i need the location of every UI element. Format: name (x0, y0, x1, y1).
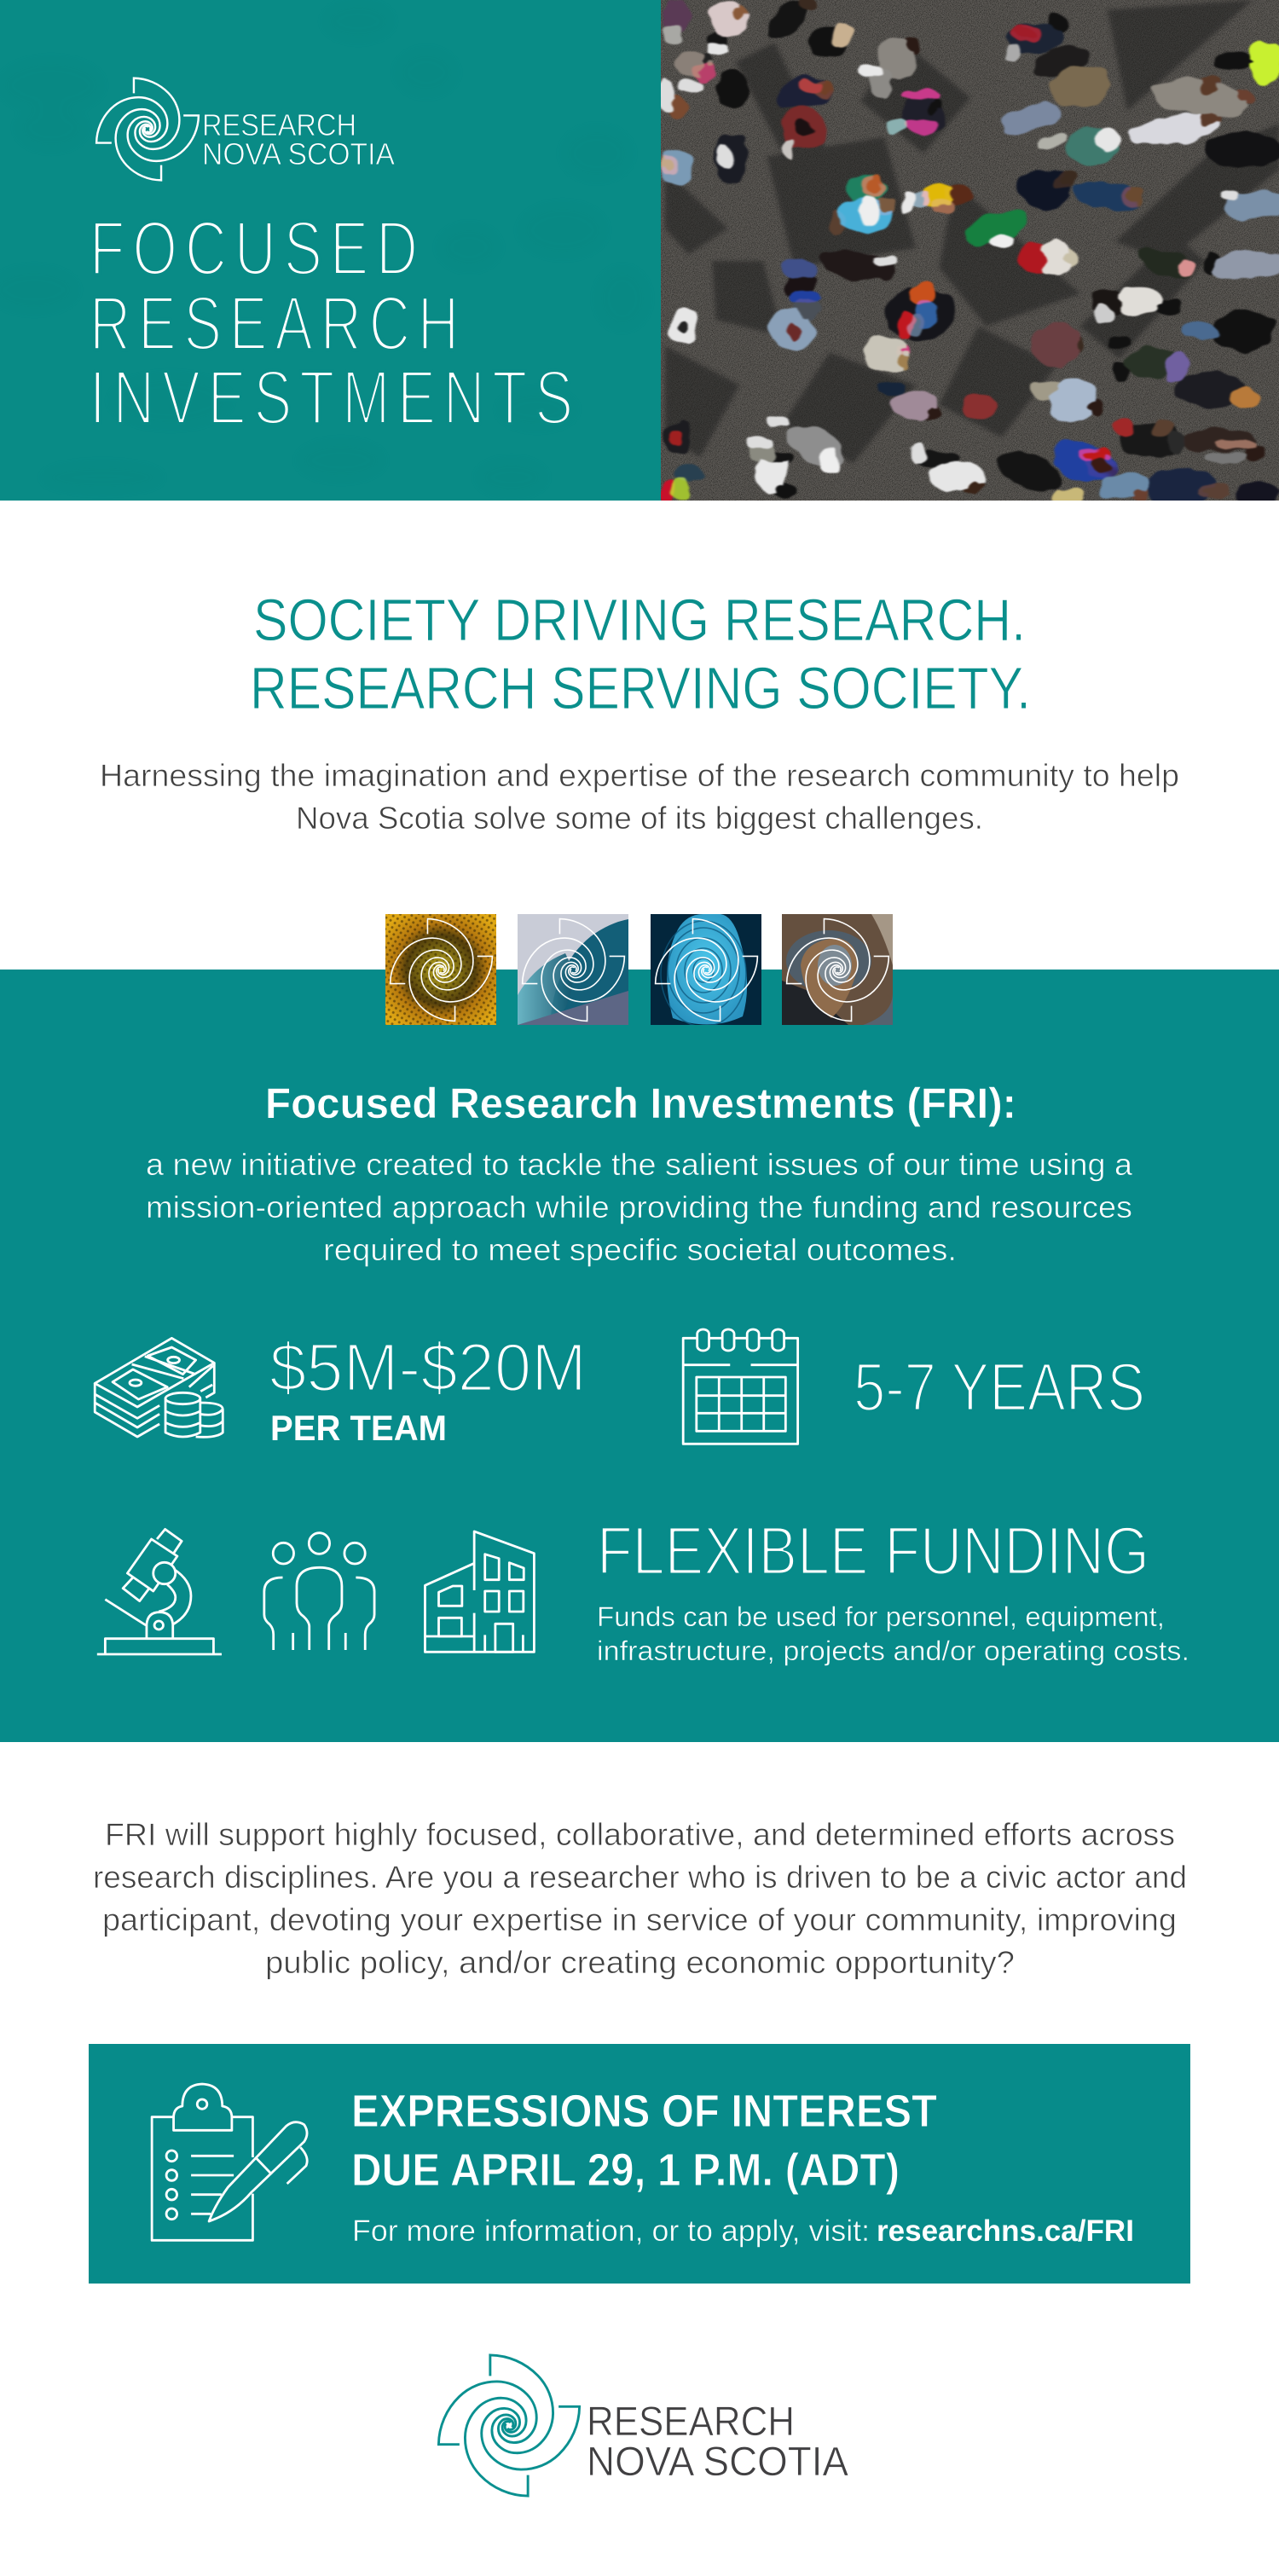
intro paragraph (100, 758, 1179, 836)
icon: spiral logo (96, 78, 199, 180)
image: ocean wave spiral (518, 914, 628, 1025)
panel: teal information section (0, 914, 1279, 1742)
intro paragraph: Harnessing the imagination and expertise of the research community to help (100, 758, 1179, 793)
heading: society driving research: RESEARCH SERVING SOCIETY. (250, 655, 1031, 721)
icon: spiral logo (438, 2355, 580, 2496)
main title: FOCUSED (90, 206, 425, 292)
panel: hero header (0, 0, 1279, 503)
stat: funding per team (95, 1329, 587, 1448)
main title (90, 206, 581, 441)
icon: microscope (97, 1529, 222, 1654)
years text: 5-7 YEARS (854, 1349, 1145, 1425)
heading: society driving research (250, 587, 1031, 721)
image: spiral staircase (782, 914, 893, 1025)
footer logo (438, 2355, 848, 2496)
flexible funding description: infrastructure, projects and/or operating costs. (597, 1635, 1189, 1666)
more information line: For more information, or to apply, visit: (352, 2214, 870, 2248)
heading: society driving research: SOCIETY DRIVING RESEARCH. (253, 587, 1026, 653)
support paragraph (93, 1817, 1187, 1980)
amount: $5M-$20M (269, 1329, 587, 1405)
wordmark: RESEARCH (202, 107, 356, 142)
icon: calendar (683, 1329, 798, 1444)
image: fingerprint spiral (651, 914, 761, 1025)
callout: expressions of interest (89, 2044, 1190, 2284)
wordmark: NOVA SCOTIA (202, 136, 395, 171)
FRI description (146, 1147, 1133, 1267)
FRI heading: Focused Research Investments (FRI): (265, 1080, 1016, 1127)
callout background (89, 2044, 1190, 2284)
section background (0, 970, 1279, 1742)
more information line: researchns.ca/FRI (877, 2214, 1134, 2248)
intro paragraph: Nova Scotia solve some of its biggest challenges. (296, 801, 983, 836)
stat: duration (683, 1329, 1145, 1444)
main title: INVESTMENTS (90, 356, 581, 441)
flexible funding description (597, 1601, 1189, 1666)
wordmark: RESEARCH (587, 2399, 795, 2445)
icon: money stack and coins (95, 1338, 223, 1437)
crowd photograph (661, 0, 1279, 501)
FRI description: mission-oriented approach while providing the funding and resources (146, 1190, 1132, 1224)
deadline text: DUE APRIL 29, 1 P.M. (ADT) (351, 2145, 900, 2196)
icon: clipboard and pen (152, 2084, 307, 2240)
support paragraph: FRI will support highly focused, collaborative, and determined efforts across (105, 1817, 1175, 1852)
more information line (352, 2214, 1134, 2248)
image strip: four natural spirals (385, 914, 893, 1027)
support paragraph: participant, devoting your expertise in service of your community, improving (102, 1902, 1177, 1937)
deadline text (351, 2086, 937, 2196)
icon: building (425, 1531, 534, 1652)
support paragraph: public policy, and/or creating economic opportunity? (265, 1945, 1015, 1980)
flexible funding description: Funds can be used for personnel, equipment, (597, 1601, 1165, 1632)
wordmark (587, 2399, 848, 2485)
flexible funding row (97, 1513, 1189, 1666)
flexible funding heading: FLEXIBLE FUNDING (597, 1513, 1149, 1589)
image: sunflower spiral (385, 914, 496, 1025)
hero logo (96, 78, 395, 180)
main title: RESEARCH (90, 281, 466, 367)
wordmark: NOVA SCOTIA (587, 2440, 848, 2485)
per team label: PER TEAM (270, 1408, 447, 1448)
icon: people group (264, 1533, 374, 1650)
FRI description: a new initiative created to tackle the salient issues of our time using a (146, 1147, 1133, 1182)
support paragraph: research disciplines. Are you a researcher who is driven to be a civic actor and (93, 1860, 1187, 1895)
deadline text: EXPRESSIONS OF INTEREST (351, 2086, 937, 2137)
wordmark (202, 107, 395, 171)
FRI description: required to meet specific societal outcomes. (323, 1232, 957, 1267)
hero teal background (0, 0, 661, 501)
